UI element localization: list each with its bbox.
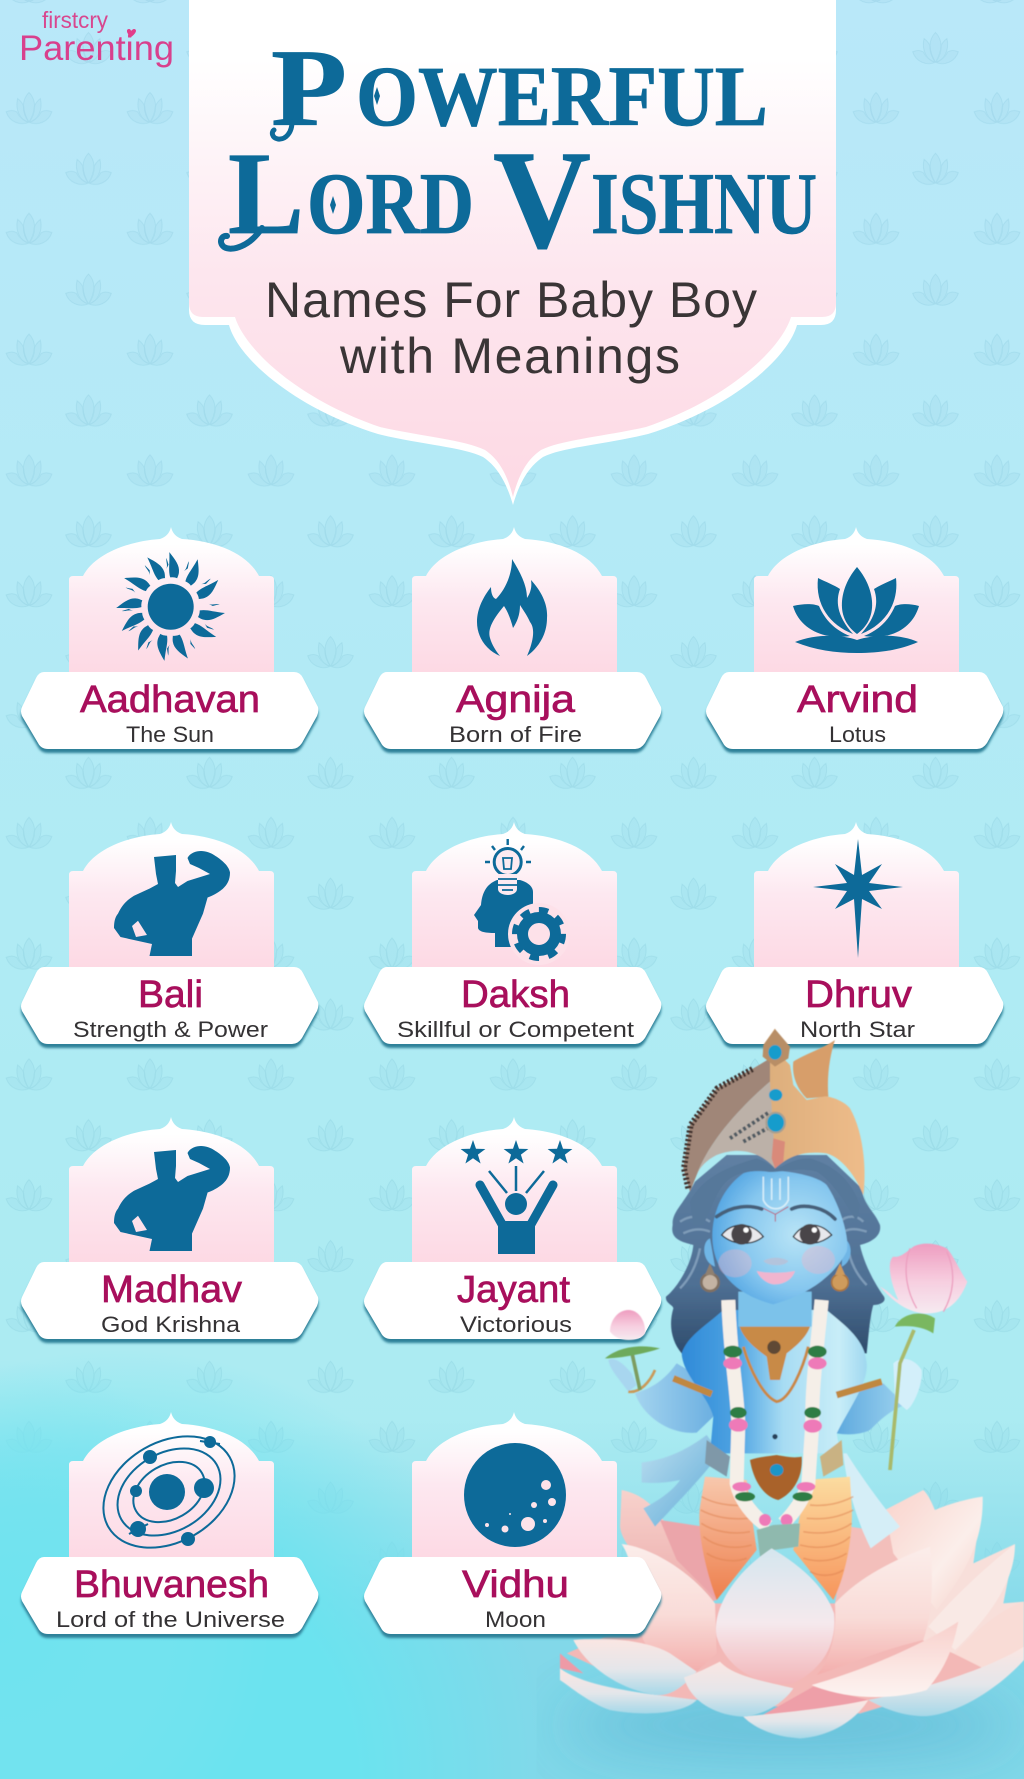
face	[712, 1170, 847, 1304]
title: Powerful Lord Vishnu: ORD	[307, 156, 474, 253]
garland	[723, 1300, 827, 1557]
earrings	[701, 1263, 848, 1291]
subtitle: with Meanings	[339, 328, 680, 384]
logo: FirstCry Parenting: firstcry	[42, 7, 108, 33]
left hand lotus	[605, 1310, 660, 1390]
meaning: North Star	[800, 1017, 915, 1042]
lower figure and lotus	[560, 1300, 1024, 1738]
meaning: Lotus	[829, 722, 886, 747]
title: Powerful Lord Vishnu	[221, 27, 817, 278]
mouth	[757, 1271, 795, 1284]
card: Aadhavan	[21, 527, 318, 753]
icon: head with bulb and gear	[474, 839, 570, 965]
right hand lotus	[880, 1244, 967, 1333]
head, face and crown	[683, 1028, 967, 1333]
right arm	[837, 1383, 912, 1434]
meaning: The Sun	[126, 722, 214, 747]
icon: flame	[477, 559, 547, 656]
meaning: Moon	[485, 1607, 546, 1632]
name: Dhruv	[805, 974, 912, 1016]
title: Powerful Lord Vishnu: OWERFUL	[356, 48, 768, 144]
dhoti legs	[699, 1477, 853, 1600]
logo: FirstCry Parenting: Parenting	[19, 29, 174, 68]
eyes	[722, 1224, 832, 1245]
name: Madhav	[101, 1269, 242, 1311]
meaning: Skillful or Competent	[397, 1017, 634, 1042]
cheeks	[718, 1246, 835, 1277]
card: Dhruv	[706, 822, 1003, 1048]
torso	[682, 1310, 867, 1453]
card: Bali	[21, 822, 318, 1048]
hair back	[666, 1155, 885, 1353]
meaning: God Krishna	[101, 1312, 241, 1337]
right hand with stem	[890, 1330, 922, 1470]
name: Bali	[138, 974, 203, 1016]
navel	[772, 1434, 778, 1439]
header banner	[189, 0, 836, 505]
name: Agnija	[456, 679, 576, 721]
title: Powerful Lord Vishnu: L	[228, 128, 304, 259]
card: Daksh	[364, 822, 661, 1048]
name: Daksh	[461, 974, 570, 1016]
left arm	[608, 1359, 717, 1433]
illustration: child Vishnu on lotus	[560, 1028, 1024, 1755]
meaning: Lord of the Universe	[56, 1607, 285, 1632]
icon: strong man	[114, 851, 230, 956]
ears	[704, 1238, 851, 1267]
crown	[683, 1028, 865, 1195]
tilak	[763, 1177, 788, 1222]
eyebrows	[717, 1206, 835, 1219]
icon: north star	[813, 839, 903, 958]
lotus back petals	[620, 1490, 1024, 1713]
meaning: Strength & Power	[73, 1017, 268, 1042]
icon: sun	[116, 552, 225, 661]
belt	[705, 1440, 843, 1500]
arm bands	[673, 1378, 882, 1395]
icon: solar system	[83, 1414, 255, 1570]
neck	[738, 1292, 812, 1327]
title: Powerful Lord Vishnu: P	[271, 27, 347, 149]
sashes	[642, 1435, 900, 1548]
card: Arvind	[706, 527, 1003, 753]
card: Bhuvanesh	[21, 1412, 318, 1638]
logo: FirstCry Parenting	[19, 7, 174, 68]
subtitle	[265, 272, 757, 384]
meaning: Victorious	[460, 1312, 572, 1337]
title: Powerful Lord Vishnu: ISHNU	[591, 156, 817, 253]
lotus front petals	[560, 1544, 1024, 1738]
nose	[763, 1258, 788, 1265]
card: Jayant	[364, 1117, 661, 1343]
name: Arvind	[797, 679, 918, 721]
meaning: Born of Fire	[449, 722, 582, 747]
name: Aadhavan	[80, 679, 260, 721]
icon: strong man	[114, 1146, 230, 1251]
name: Vidhu	[462, 1564, 569, 1606]
hair fringe	[690, 1158, 860, 1225]
subtitle: Names For Baby Boy	[265, 272, 757, 328]
title: Powerful Lord Vishnu: V	[493, 122, 591, 278]
name: Jayant	[457, 1269, 570, 1311]
icon: moon	[464, 1443, 566, 1547]
card: Vidhu	[364, 1412, 661, 1638]
name: Bhuvanesh	[74, 1564, 269, 1606]
icon: victory figure with stars	[461, 1140, 572, 1254]
lotus ground shadow	[560, 1695, 1020, 1755]
necklace	[738, 1320, 812, 1402]
card: Madhav	[21, 1117, 318, 1343]
icon: lotus	[793, 567, 919, 653]
card: Agnija	[364, 527, 661, 753]
